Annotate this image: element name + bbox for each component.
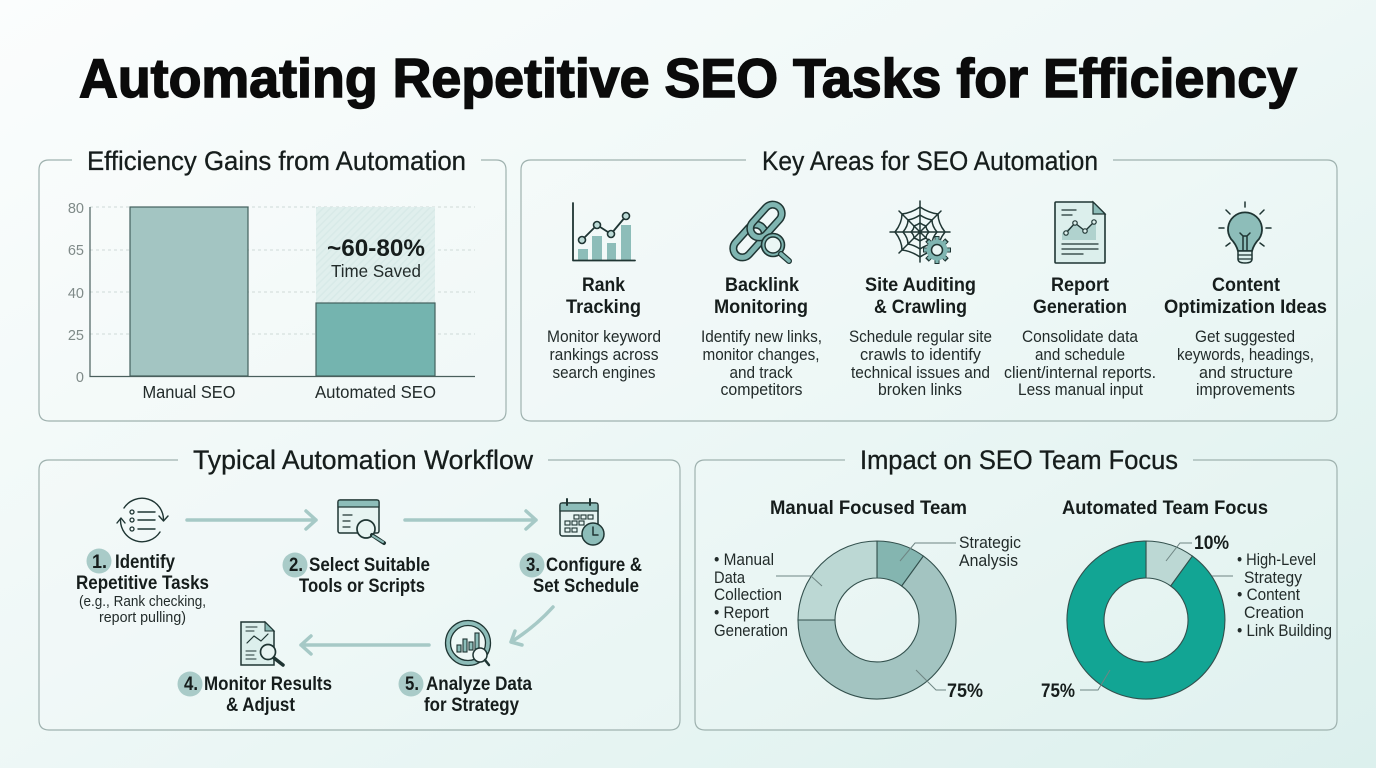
subheading: automated team: Automated Team Focus bbox=[1062, 497, 1268, 519]
icon: light bulb bbox=[1219, 202, 1271, 263]
callout: time saved bbox=[327, 235, 425, 281]
step 1: identify bbox=[76, 498, 209, 626]
step 3: configure: Set Schedule bbox=[533, 575, 639, 597]
callout: time saved: Time Saved bbox=[331, 261, 421, 281]
panel: key areas bbox=[521, 146, 1337, 421]
item: content optimization: improvements bbox=[1196, 381, 1295, 399]
donut: manual team bbox=[798, 541, 956, 699]
step 4: monitor bbox=[178, 622, 332, 716]
step 2: select tools bbox=[282, 500, 430, 597]
item: report generation: and schedule bbox=[1035, 346, 1125, 364]
step 2: select tools: 2. bbox=[289, 554, 303, 576]
step 1: identify: Identify bbox=[115, 551, 175, 573]
heading: efficiency gains: Efficiency Gains from Automation bbox=[87, 146, 466, 176]
icon: browser with magnifier bbox=[338, 500, 384, 543]
value: 75 percent: 75% bbox=[947, 681, 983, 702]
label: manual tasks: Generation bbox=[714, 622, 788, 640]
item: rank tracking: Rank bbox=[582, 274, 625, 296]
chart: manual focused team bbox=[714, 497, 1021, 702]
step 2: select tools: Select Suitable bbox=[309, 554, 430, 576]
arrow: step 5 to 4 bbox=[301, 636, 429, 654]
item: rank tracking: search engines bbox=[552, 364, 656, 382]
label: strategic analysis: Strategic bbox=[959, 534, 1021, 552]
step 3: configure: 3. bbox=[526, 554, 540, 576]
bar chart: manual vs automated time: 65 bbox=[68, 243, 84, 259]
item: report generation bbox=[1004, 202, 1156, 399]
heading: team focus: Impact on SEO Team Focus bbox=[860, 445, 1178, 475]
bar chart: manual vs automated time: 0 bbox=[76, 370, 84, 386]
item: report generation: client/internal reports. bbox=[1004, 364, 1156, 382]
title: Automating Repetitive SEO Tasks for Efficiency bbox=[79, 47, 1297, 109]
item: content optimization: Content bbox=[1212, 274, 1280, 296]
label: manual tasks bbox=[714, 551, 788, 640]
label: automated tasks: Strategy bbox=[1244, 569, 1303, 587]
label: automated tasks: • Link Building bbox=[1237, 622, 1332, 640]
heading: key areas: Key Areas for SEO Automation bbox=[762, 146, 1098, 176]
step 1: identify: report pulling) bbox=[99, 609, 186, 626]
item: content optimization: and structure bbox=[1199, 364, 1293, 382]
step 1: identify: (e.g., Rank checking, bbox=[79, 593, 206, 610]
label: strategic analysis: Analysis bbox=[959, 552, 1018, 570]
panel: efficiency gains bbox=[39, 146, 506, 421]
callout: time saved: ~60-80% bbox=[327, 235, 425, 262]
item: backlink monitoring: Backlink bbox=[725, 274, 799, 296]
step 5: analyze bbox=[398, 620, 532, 716]
bar chart: manual vs automated time: 80 bbox=[68, 201, 84, 217]
label: manual tasks: • Report bbox=[714, 604, 769, 622]
panel: workflow bbox=[39, 445, 680, 730]
value: 75 percent automated: 75% bbox=[1041, 681, 1075, 702]
step 3: configure: Configure & bbox=[546, 554, 642, 576]
label: automated tasks: Creation bbox=[1244, 604, 1304, 622]
icon: report document bbox=[1055, 202, 1105, 263]
item: site auditing: & Crawling bbox=[874, 296, 967, 318]
item: site auditing: Schedule regular site bbox=[849, 328, 992, 346]
item: rank tracking: Tracking bbox=[566, 296, 641, 318]
item: site auditing bbox=[849, 201, 992, 399]
icon: analytics ring bbox=[446, 620, 490, 666]
item: content optimization: Optimization Ideas bbox=[1164, 296, 1327, 318]
item: report generation: Report bbox=[1051, 274, 1109, 296]
item: content optimization: Get suggested bbox=[1195, 328, 1295, 346]
step 5: analyze: 5. bbox=[405, 673, 419, 695]
item: backlink monitoring: competitors bbox=[720, 381, 802, 399]
icon: spider web and gear bbox=[890, 201, 951, 264]
icon: calendar and clock bbox=[560, 499, 604, 545]
step 4: monitor: Monitor Results bbox=[204, 673, 332, 695]
subheading: manual team: Manual Focused Team bbox=[770, 497, 967, 519]
icon: document with magnifier bbox=[241, 622, 283, 665]
item: rank tracking bbox=[547, 203, 661, 382]
label: automated tasks: • Content bbox=[1237, 586, 1300, 604]
item: backlink monitoring bbox=[701, 201, 822, 399]
item: backlink monitoring: Identify new links, bbox=[701, 328, 822, 346]
item: report generation: Less manual input bbox=[1018, 381, 1143, 399]
bar chart: manual vs automated time bbox=[68, 201, 475, 402]
item: rank tracking: Monitor keyword bbox=[547, 328, 661, 346]
arrow: step 2 to 3 bbox=[405, 511, 536, 529]
item: site auditing: crawls to identify bbox=[860, 346, 982, 364]
item: backlink monitoring: monitor changes, bbox=[702, 346, 820, 364]
bar chart: manual vs automated time: 40 bbox=[68, 286, 84, 302]
donut: automated team bbox=[1067, 541, 1225, 699]
item: site auditing: Site Auditing bbox=[865, 274, 976, 296]
step 2: select tools: Tools or Scripts bbox=[299, 575, 425, 597]
step 4: monitor: 4. bbox=[184, 673, 198, 695]
label: manual tasks: Data bbox=[714, 569, 746, 587]
item: backlink monitoring: and track bbox=[730, 364, 793, 382]
item: backlink monitoring: Monitoring bbox=[714, 296, 808, 318]
step 5: analyze: for Strategy bbox=[424, 694, 519, 716]
label: manual tasks: Collection bbox=[714, 586, 782, 604]
icon: chain link and magnifier bbox=[730, 201, 789, 261]
item: rank tracking: rankings across bbox=[550, 346, 658, 364]
item: content optimization: keywords, headings, bbox=[1177, 346, 1314, 364]
bar chart: manual vs automated time: Automated SEO bbox=[315, 382, 436, 402]
label: automated tasks: • High-Level bbox=[1237, 551, 1316, 569]
bar chart: manual vs automated time: Manual SEO bbox=[142, 382, 236, 402]
label: manual tasks: • Manual bbox=[714, 551, 774, 569]
arrow: step 1 to 2 bbox=[187, 511, 316, 529]
label: automated tasks bbox=[1237, 551, 1332, 640]
step 4: monitor: & Adjust bbox=[226, 694, 295, 716]
chart: automated team focus bbox=[1041, 497, 1332, 702]
step 1: identify: 1. bbox=[92, 551, 107, 573]
heading: workflow: Typical Automation Workflow bbox=[193, 445, 534, 475]
icon: rank chart bbox=[573, 203, 635, 260]
panel: team focus bbox=[695, 445, 1337, 730]
item: site auditing: broken links bbox=[878, 381, 962, 399]
item: report generation: Consolidate data bbox=[1022, 328, 1139, 346]
item: content optimization bbox=[1164, 202, 1327, 399]
label: strategic analysis bbox=[959, 534, 1021, 570]
step 3: configure bbox=[520, 499, 642, 597]
bar chart: manual vs automated time: 25 bbox=[68, 328, 84, 344]
item: report generation: Generation bbox=[1033, 296, 1127, 318]
value: 10 percent: 10% bbox=[1194, 533, 1229, 554]
item: site auditing: technical issues and bbox=[851, 364, 990, 382]
step 1: identify: Repetitive Tasks bbox=[76, 572, 209, 594]
icon: cyclic checklist bbox=[117, 498, 168, 542]
arrow: step 3 to 5 bbox=[511, 607, 553, 645]
step 5: analyze: Analyze Data bbox=[426, 673, 532, 695]
